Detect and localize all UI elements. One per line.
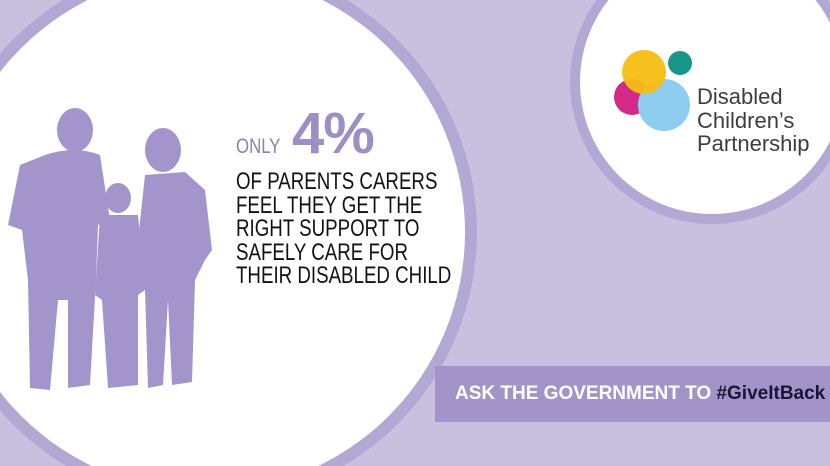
stat text [236,101,451,289]
icon: balloons [614,50,692,131]
child [95,183,145,388]
stat headline: 4% [292,101,374,166]
stat description: FEEL THEY GET THE [236,192,422,218]
logo text: Disabled [697,84,783,109]
stat description: RIGHT SUPPORT TO [236,215,419,242]
stat headline: ONLY [236,135,281,158]
logo text: Children’s [697,108,794,132]
logo text: Partnership [697,131,810,156]
call to action banner [435,366,830,422]
logo text [697,84,810,156]
stat headline [236,101,374,166]
stat description [236,168,451,289]
illustration: family silhouettes [8,108,212,390]
call to action banner: ASK THE GOVERNMENT TO #GiveItBack [455,383,825,404]
stat description: OF PARENTS CARERS [236,168,437,195]
logo [614,50,810,156]
father [8,108,110,390]
mother [138,128,212,388]
stat description: THEIR DISABLED CHILD [236,262,451,289]
stat description: SAFELY CARE FOR [236,238,408,266]
